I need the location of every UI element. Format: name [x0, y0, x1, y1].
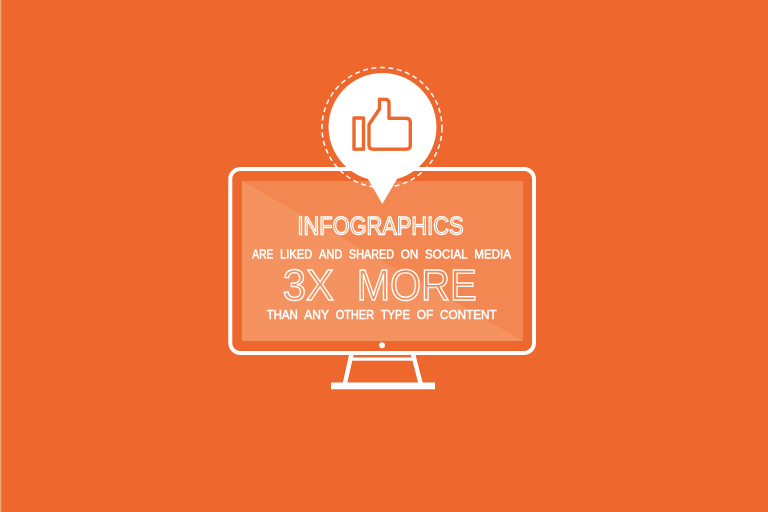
- text: than any other: TYPE: [381, 308, 410, 322]
- text: than any other: CONTENT: [440, 308, 497, 322]
- text: liked and shared: ON: [401, 248, 418, 262]
- text: than any other: THAN: [267, 308, 298, 322]
- stand base: [331, 382, 435, 389]
- headline: 3x more: 3X: [283, 261, 334, 310]
- text: liked and shared: SHARED: [349, 248, 394, 262]
- text: liked and shared: MEDIA: [474, 248, 512, 262]
- text: liked and shared: [252, 248, 512, 262]
- dashed ring: [322, 68, 442, 188]
- like badge: [322, 68, 442, 204]
- text: liked and shared: SOCIAL: [425, 248, 468, 262]
- text: than any other: OF: [417, 308, 434, 322]
- heading: infographics: INFOGRAPHICS: [298, 212, 464, 240]
- text: liked and shared: AND: [319, 248, 342, 262]
- screen: [242, 181, 523, 341]
- icon: thumbs up: [354, 99, 410, 149]
- text: than any other: [267, 308, 497, 322]
- text: than any other: OTHER: [336, 308, 374, 322]
- thumb cuff: [354, 118, 364, 149]
- headline: 3x more: [283, 261, 477, 310]
- text: than any other: ANY: [304, 308, 330, 322]
- text: liked and shared: ARE: [252, 248, 273, 262]
- monitor frame: [230, 169, 534, 353]
- power button: [379, 342, 385, 348]
- headline: 3x more: MORE: [357, 261, 477, 310]
- speech bubble: [329, 73, 436, 204]
- stand legs: [345, 354, 420, 383]
- monitor: [230, 169, 534, 389]
- monitor stand: [331, 354, 435, 389]
- screen diagonal highlight: [242, 181, 523, 341]
- screen text: [252, 212, 512, 322]
- stand crossbar: [350, 358, 415, 361]
- thumb hand: [369, 99, 410, 149]
- text: liked and shared: LIKED: [280, 248, 312, 262]
